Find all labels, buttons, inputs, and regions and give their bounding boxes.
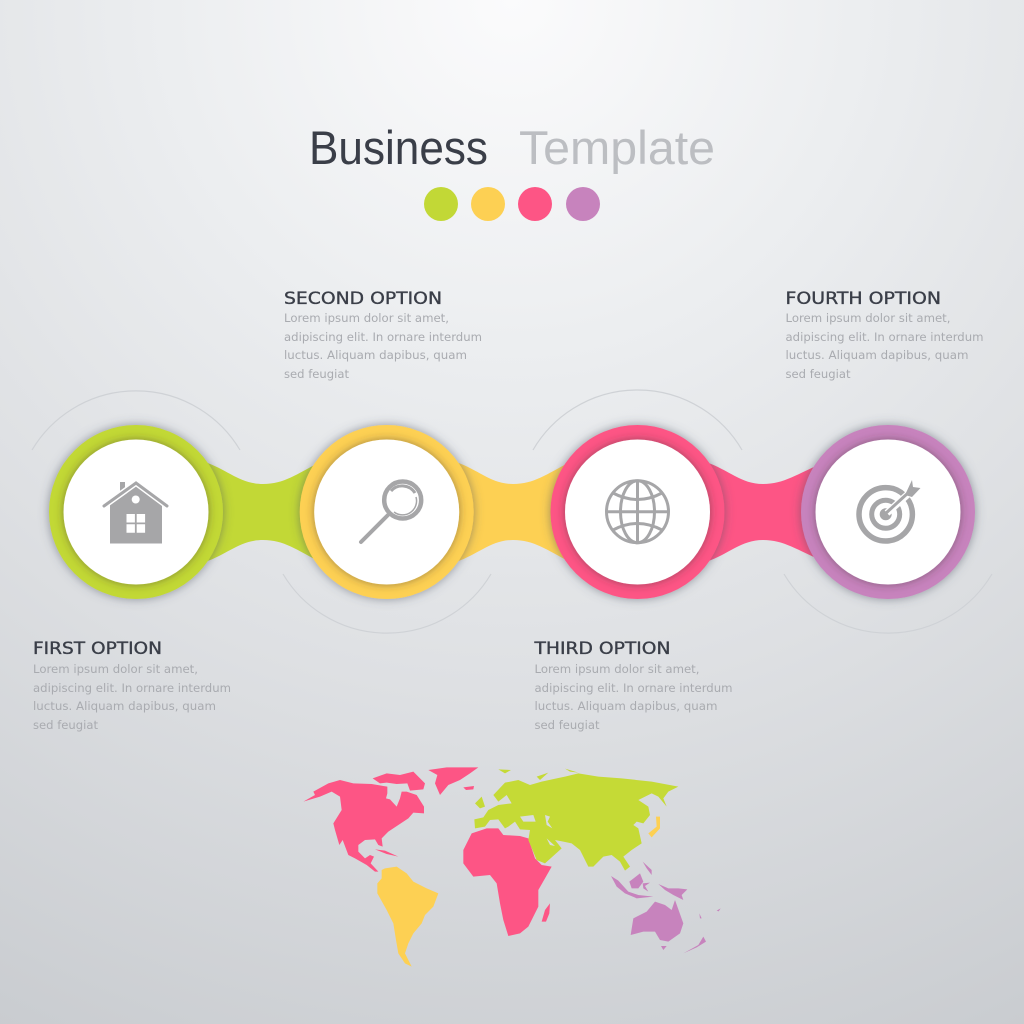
text: fourth option: adipiscing elit. In ornare interdum <box>786 330 984 344</box>
text: second option: luctus. Aliquam dapibus, quam <box>284 348 467 362</box>
title: Template <box>519 121 715 174</box>
text: third option: Lorem ipsum dolor sit amet, <box>534 662 700 676</box>
colour dots <box>424 187 600 221</box>
text: second option <box>284 289 482 381</box>
step 3: pink circle with globe icon <box>550 425 724 599</box>
text: third option <box>533 639 732 732</box>
text: third option: sed feugiat <box>534 718 600 732</box>
text: third option: luctus. Aliquam dapibus, quam <box>534 699 718 713</box>
text: second option: SECOND OPTION <box>284 289 442 308</box>
map: South America <box>377 867 438 967</box>
text: third option: adipiscing elit. In ornare interdum <box>534 681 732 695</box>
text: second option: sed feugiat <box>284 367 349 381</box>
text: first option <box>33 639 231 732</box>
connector: yellow <box>456 462 570 562</box>
step 2: yellow circle with magnifier icon <box>300 425 474 599</box>
title <box>309 121 715 174</box>
icon: house <box>104 482 167 544</box>
text: second option: Lorem ipsum dolor sit amet, <box>284 311 449 325</box>
connector: pink <box>706 462 825 562</box>
icon: magnifier <box>361 482 421 542</box>
text: fourth option: FOURTH OPTION <box>786 289 941 308</box>
text: fourth option: Lorem ipsum dolor sit amet, <box>786 311 950 325</box>
text: first option: sed feugiat <box>33 718 98 732</box>
text: fourth option <box>786 289 984 381</box>
map: Japan <box>648 817 660 837</box>
text: second option: adipiscing elit. In ornare interdum <box>284 330 482 344</box>
text: third option: THIRD OPTION <box>533 639 670 658</box>
map: Eurasia <box>474 769 678 871</box>
text: first option: adipiscing elit. In ornare interdum <box>33 681 231 695</box>
title: Business <box>309 121 488 174</box>
step 1: green circle with house icon <box>49 425 223 599</box>
step 4: purple circle with target icon <box>801 425 975 599</box>
text: first option: Lorem ipsum dolor sit amet, <box>33 662 198 676</box>
text: fourth option: luctus. Aliquam dapibus, quam <box>786 348 968 362</box>
map: Africa <box>463 828 552 936</box>
map: Oceania and South-East Asia <box>611 862 721 953</box>
text: first option: FIRST OPTION <box>33 639 162 658</box>
text: first option: luctus. Aliquam dapibus, quam <box>33 699 216 713</box>
text: fourth option: sed feugiat <box>786 367 851 381</box>
faint rings around the circles <box>32 390 992 633</box>
icon: target <box>859 480 920 541</box>
connector: green <box>205 462 320 562</box>
icon: globe <box>606 481 668 543</box>
world map <box>303 767 721 967</box>
map: North America and Greenland <box>303 767 478 872</box>
